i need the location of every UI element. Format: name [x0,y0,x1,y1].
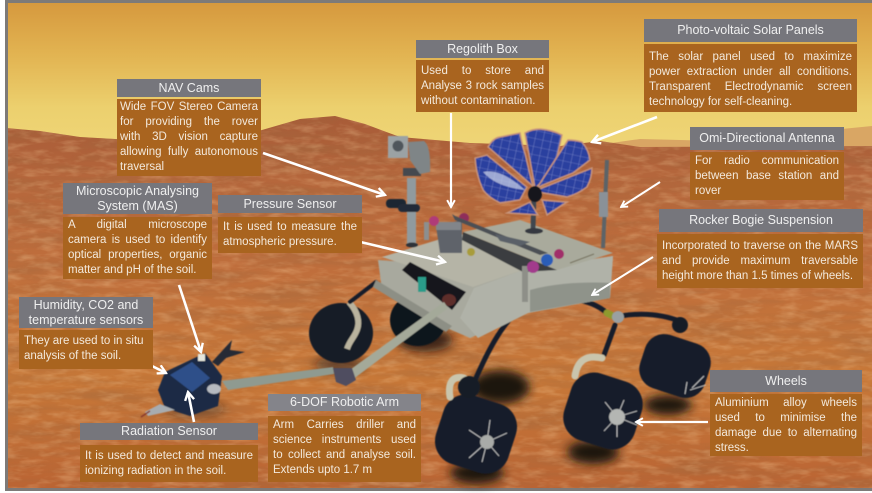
panel: Radiation Sensor: ionizing radiation in the soil. [85,465,226,477]
panel: NAV Cams: NAV Cams [159,80,219,94]
rover shadows [165,328,692,484]
panel: Humidity, CO2 and temperature sensors: analysis of the soil. [24,350,121,362]
panel: Photo-voltaic Solar Panels: Transparent Electrodynamic screen [649,81,852,93]
panel: Rocker Bogie Suspension: height more than 1.5 times of wheels. [662,270,853,282]
arrow: solar panels [592,117,657,142]
panel: Rocker Bogie Suspension [657,209,863,288]
arrow: MAS [179,285,201,352]
nav cam mast [386,136,430,248]
panel: 6-DOF Robotic Arm: 6-DOF Robotic Arm [290,395,399,409]
panel: Wheels: Aluminium alloy wheels [715,397,857,409]
panel: NAV Cams: allowing fully autonomous [120,146,258,158]
panel: Regolith Box: Used to store and [421,65,544,77]
panel: NAV Cams: traversal [120,161,164,173]
robotic arm [222,302,448,390]
panel: Radiation Sensor: Radiation Sensor [121,424,217,438]
panel: NAV Cams: for providing the rover [120,116,258,128]
panel: Humidity, CO2 and temperature sensors: Humidity, CO2 and [34,298,138,312]
arrow: wheels [636,421,708,423]
chassis [373,220,613,338]
arrow: NAV cams [263,153,385,195]
panel: Rocker Bogie Suspension: and provide maximum traversable [662,255,858,267]
panel: Omni-Directional Antenna: rover [695,185,721,197]
panel: Rocker Bogie Suspension: Incorporated to traverse on the MARS [662,240,858,252]
panel: Pressure Sensor: Pressure Sensor [243,196,337,210]
regolith box and cables [424,213,564,273]
arrow: humidity sensors [130,355,166,373]
panel: 6-DOF Robotic Arm: Arm Carries driller and [273,419,416,431]
panel: Humidity, CO2 and temperature sensors: temperature sensors [29,312,143,326]
panel: NAV Cams [117,79,261,176]
panel: Pressure Sensor [218,195,362,253]
arrow: regolith box [450,113,452,207]
panel: Photo-voltaic Solar Panels: power extraction under all conditions. [649,66,852,78]
panel: Humidity, CO2 and temperature sensors: They are used to in situ [24,335,144,347]
rover [141,129,716,480]
arm sensor head [141,340,245,417]
panel: Pressure Sensor: atmospheric pressure. [223,236,337,248]
solar panels [475,129,592,234]
panel: Radiation Sensor [80,423,258,482]
panel: Microscopic Analysing System: System (MAS) [97,198,178,212]
panel: Wheels: damage due to alternating [715,427,857,439]
panel: Wheels [710,370,862,456]
panel: Wheels: Wheels [765,374,807,388]
panel: Regolith Box [416,40,549,112]
panel: Omni-Directional Antenna: For radio communication [695,155,839,167]
panel: NAV Cams: Wide FOV Stereo Camera [120,101,258,113]
panel: Microscopic Analysing System: camera is used to identify [68,234,207,246]
panel: NAV Cams: with 3D vision capture [120,131,258,143]
panel: Regolith Box: without contamination. [421,95,535,107]
arrow: antenna [621,182,660,207]
panel: Microscopic Analysing System: optical properties, organic [68,249,207,261]
panel: Wheels: used to minimise the [715,412,857,424]
panel: 6-DOF Robotic Arm: science instruments used [273,434,416,446]
panel: Omni-Directional Antenna: Omi-Directional Antenna [699,131,835,145]
arrow: rocker bogie [592,257,653,295]
arrow: radiation sensor [188,392,194,422]
panel: Microscopic Analysing System [63,183,212,279]
arrow: pressure sensor [352,240,445,262]
panel: Rocker Bogie Suspension: Rocker Bogie Suspension [689,213,833,227]
panel: Radiation Sensor: It is used to detect and measure [85,450,253,462]
antenna [599,160,608,248]
suspension [350,282,682,397]
panel: Regolith Box: Regolith Box [447,42,518,56]
panel: 6-DOF Robotic Arm [268,394,421,482]
panel: Microscopic Analysing System: Microscopic Analysing [76,184,199,198]
panel: Omni-Directional Antenna: between base station and [695,170,839,182]
panel: Omni-Directional Antenna [690,127,844,200]
panel: Photo-voltaic Solar Panels: Photo-voltaic Solar Panels [677,23,824,37]
panel: 6-DOF Robotic Arm: Extends upto 1.7 m [273,464,372,476]
panel: Regolith Box: Analyse 3 rock samples [421,80,544,92]
panel: Humidity, CO2 and temperature sensors [19,297,153,369]
panel: Photo-voltaic Solar Panels: The solar panel used to maximize [649,51,852,63]
panel: Photo-voltaic Solar Panels [644,19,857,112]
panel: Pressure Sensor: It is used to measure the [223,221,357,233]
wheels [309,294,716,480]
panel: 6-DOF Robotic Arm: to collect and analyse soil. [273,449,416,461]
panel: Microscopic Analysing System: matter and pH of the soil. [68,264,196,276]
panel: Microscopic Analysing System: A digital microscope [68,219,207,231]
panel: Wheels: stress. [715,442,749,454]
panel: Photo-voltaic Solar Panels: technology for self-cleaning. [649,96,792,108]
